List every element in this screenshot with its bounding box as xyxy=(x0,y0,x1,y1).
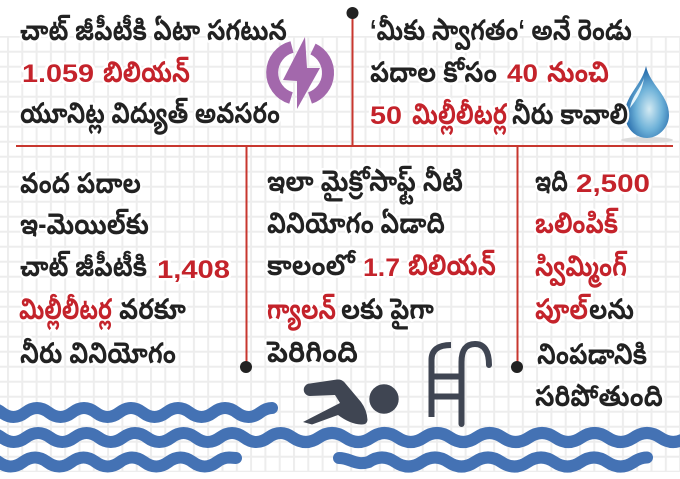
text line: లకు పైగా xyxy=(341,294,434,330)
highlighted figure: 40 xyxy=(507,60,538,88)
text line: నీరు వినియోగం xyxy=(20,337,176,370)
text line: చాట్ జీపీటీకి ఏటా సగటున xyxy=(20,14,287,47)
text line: యూనిట్ల విద్యుత్ అవసరం xyxy=(20,97,280,135)
highlighted unit: మిల్లీలీటర్ల xyxy=(19,293,113,331)
highlighted word: పూల్ xyxy=(535,293,591,326)
highlighted unit: బిలియన్ xyxy=(103,56,190,89)
highlighted figure: 1.7 xyxy=(363,254,400,282)
text line: నింపడానికి xyxy=(537,339,647,371)
panel: email water use xyxy=(19,168,230,370)
text line: ఇ-మెయిల్‌కు xyxy=(20,208,149,241)
panel: electricity xyxy=(20,14,287,135)
text line: పెరిగింది xyxy=(266,337,358,369)
text line: పదాల కోసం xyxy=(370,56,497,89)
text line: చాట్ జీపీటీకి xyxy=(20,250,147,283)
divider lines xyxy=(16,7,673,373)
text line: ఇది xyxy=(535,166,568,198)
highlighted figure: 1.059 xyxy=(22,60,94,88)
highlighted figure: 2,500 xyxy=(576,170,650,198)
highlighted line: స్విమ్మింగ్ xyxy=(535,250,628,288)
text line: వరకూ xyxy=(119,294,186,326)
water waves xyxy=(0,408,680,466)
highlighted unit: మిల్లీలీటర్ల xyxy=(412,98,508,136)
icon: swimmer xyxy=(303,379,399,425)
text line: ఇలా మైక్రోసాఫ్ట్ నీటి xyxy=(267,165,463,205)
highlighted word: నుంచి xyxy=(547,57,609,89)
text line: నీరు కావాలి xyxy=(512,98,628,131)
text line: లను xyxy=(589,294,634,326)
panel: water per greeting xyxy=(370,14,632,136)
panel: Olympic pools xyxy=(535,166,663,413)
panel: Microsoft water use xyxy=(266,165,496,369)
highlighted line: ఒలింపిక్ xyxy=(535,207,619,240)
highlighted figure: 1,408 xyxy=(157,256,230,284)
icon: lightning bolt xyxy=(272,37,328,109)
icon: pool ladder xyxy=(431,344,489,424)
highlighted unit: బిలియన్ xyxy=(408,249,496,282)
text line: వినియోగం ఏడాది xyxy=(267,208,445,240)
highlighted unit: గ్యాలన్ xyxy=(267,293,336,331)
text line: సరిపోతుంది xyxy=(535,381,663,413)
text line: కాలంలో xyxy=(267,249,357,282)
highlighted figure: 50 xyxy=(370,102,402,130)
icon: water drop xyxy=(621,66,673,143)
text line: వంద పదాల xyxy=(20,168,141,200)
